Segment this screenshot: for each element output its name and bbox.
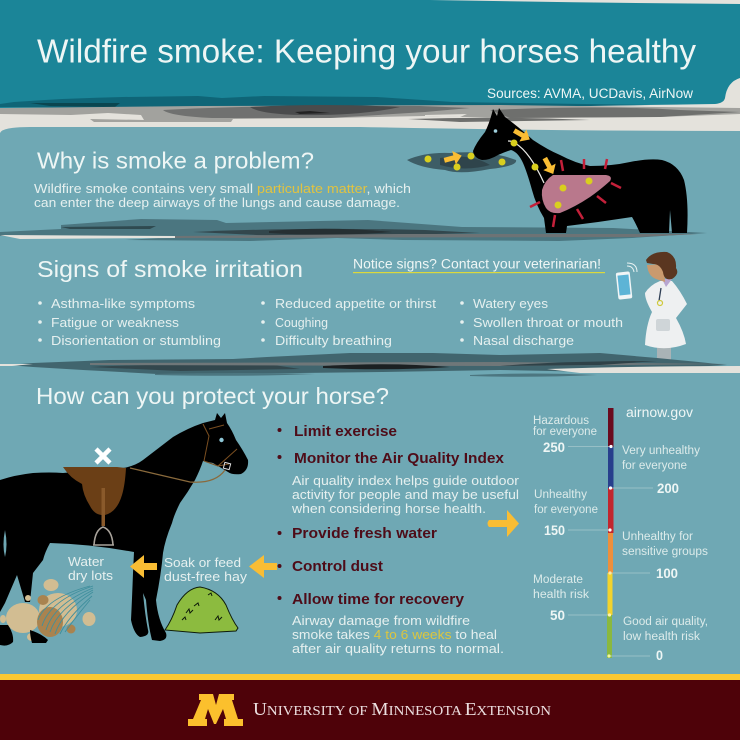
list: symptoms column 3: Swollen throat or mouth [473, 315, 623, 330]
level 0: Good air quality, [623, 616, 708, 628]
list: protection steps: Control dust [292, 558, 383, 575]
horse: saddled [0, 413, 248, 641]
stirrup strap [102, 488, 105, 526]
text: recovery note: smoke takes 4 to 6 weeks to heal [292, 627, 497, 642]
list: protection steps [278, 423, 520, 656]
phone signal [627, 263, 637, 272]
list: protection steps: Provide fresh water [292, 525, 437, 542]
level 150 [534, 489, 598, 538]
title: Wildfire smoke: Keeping your horses healthy [37, 32, 696, 70]
airway [508, 141, 544, 183]
footer band [0, 674, 740, 740]
level 100: Unhealthy for [622, 531, 693, 543]
text: smoke explanation: can enter the deep airways of the lungs and cause damage. [34, 195, 400, 210]
eye [219, 438, 224, 442]
bridle [203, 424, 237, 466]
list: symptoms column 1: Fatigue or weakness [51, 315, 180, 330]
panel: lower teal background [0, 127, 740, 675]
list: symptoms column 1 [38, 296, 221, 348]
level 50: health risk [533, 589, 589, 601]
tail gap [4, 530, 6, 557]
text: air quality note [291, 473, 520, 516]
level 100 [622, 531, 708, 581]
illustration: dirt and water spray [0, 579, 96, 646]
particles [424, 140, 592, 208]
arrow: to soak hay [249, 555, 277, 578]
level 150: for everyone [534, 504, 598, 516]
icon: hay pile [165, 587, 238, 633]
smoke band: middle [0, 219, 707, 241]
airflow arrows [442, 124, 559, 177]
text: recovery note: Airway damage from wildfire [292, 613, 470, 628]
label: water dry lots [68, 554, 114, 583]
eye [494, 129, 497, 133]
list: symptoms column 2: Coughing [275, 315, 328, 330]
logo: block M [188, 694, 243, 726]
text: smoke explanation [34, 181, 411, 210]
label: soak or feed hay: dust-free hay [164, 569, 248, 584]
illustration: veterinarian with phone [616, 252, 687, 366]
text: air quality note: activity for people and may be useful [292, 487, 519, 502]
text: recovery note [292, 613, 504, 656]
list: symptoms column 3 [460, 296, 623, 348]
panel: title banner [0, 0, 740, 108]
legs [657, 346, 671, 366]
list: symptoms column 2 [261, 296, 436, 348]
water spray [38, 586, 93, 634]
level 200 [622, 445, 700, 496]
label: water dry lots: dry lots [68, 568, 114, 583]
icon: no riding X [96, 449, 110, 463]
level 100: sensitive groups [622, 546, 708, 558]
list: protection steps: Allow time for recovery [292, 591, 465, 608]
text: recovery note: after air quality returns to normal. [292, 641, 504, 656]
hair [646, 252, 677, 279]
level 150: Unhealthy [534, 489, 587, 501]
irritation marks [530, 159, 621, 227]
text: air quality note: Air quality index helps guide outdoor [292, 473, 520, 488]
lungs [542, 175, 611, 213]
label: soak or feed hay: Soak or feed [164, 555, 241, 570]
horse silhouette [0, 413, 248, 641]
text: air quality note: when considering horse health. [291, 501, 486, 516]
stirrup [93, 527, 114, 545]
list: protection steps: Limit exercise [294, 423, 397, 440]
level 50: 50 [550, 607, 565, 623]
face [647, 264, 665, 282]
list: symptoms column 3: Nasal discharge [473, 333, 574, 348]
horse silhouette [473, 108, 688, 233]
level 200: Very unhealthy [622, 445, 700, 457]
label: soak or feed hay [164, 555, 248, 584]
label: water dry lots: Water [68, 554, 105, 569]
level 50: Moderate [533, 574, 583, 586]
level 100: 100 [656, 565, 678, 581]
saddle [63, 467, 126, 515]
level 250: 250 [543, 439, 565, 455]
pocket [656, 319, 670, 331]
scale bar [607, 408, 614, 658]
smoke band: top [0, 96, 740, 122]
level 50 [533, 574, 589, 623]
level 0 [623, 616, 708, 663]
list: protection steps: Monitor the Air Quality Index [294, 450, 505, 467]
source: airnow.gov [626, 405, 693, 420]
stethoscope [659, 288, 661, 301]
level 200: 200 [657, 480, 679, 496]
heading: why is smoke a problem: Why is smoke a problem? [37, 148, 314, 174]
level 250: Hazardous [533, 415, 589, 427]
level 150: 150 [544, 522, 565, 538]
heading: how can you protect your horse: How can you protect your horse? [36, 383, 389, 409]
chart: air quality index scale [533, 405, 708, 663]
arrow: to AQI scale [488, 510, 519, 537]
smoke cloud at nose [407, 152, 516, 172]
level 0: low health risk [623, 631, 700, 643]
phone [616, 271, 632, 300]
list: symptoms column 1: Asthma-like symptoms [51, 296, 196, 311]
heading: signs of smoke irritation: Signs of smoke irritation [37, 256, 303, 282]
level 200: for everyone [622, 460, 687, 472]
hooves [0, 625, 48, 646]
reins [130, 468, 225, 482]
sources: Sources: AVMA, UCDavis, AirNow [487, 86, 693, 101]
smoke band: lower [0, 353, 740, 377]
horse: lungs diagram [424, 108, 688, 233]
list: symptoms column 2: Reduced appetite or thirst [275, 296, 436, 311]
callout: contact veterinarian: Notice signs? Contact your veterinarian! [353, 256, 601, 272]
organization name: UNIVERSITY OF MINNESOTA EXTENSION [253, 699, 551, 719]
list: symptoms column 3: Watery eyes [473, 296, 549, 311]
level 0: 0 [656, 647, 663, 663]
arrow: to water dry lots [130, 555, 157, 578]
text: smoke explanation: Wildfire smoke contains very small particulate matter , which [34, 181, 411, 196]
level 250 [533, 415, 597, 455]
coat [645, 281, 687, 348]
list: symptoms column 1: Disorientation or stumbling [51, 333, 221, 348]
level 250: for everyone [533, 426, 597, 438]
list: symptoms column 2: Difficulty breathing [275, 333, 392, 348]
